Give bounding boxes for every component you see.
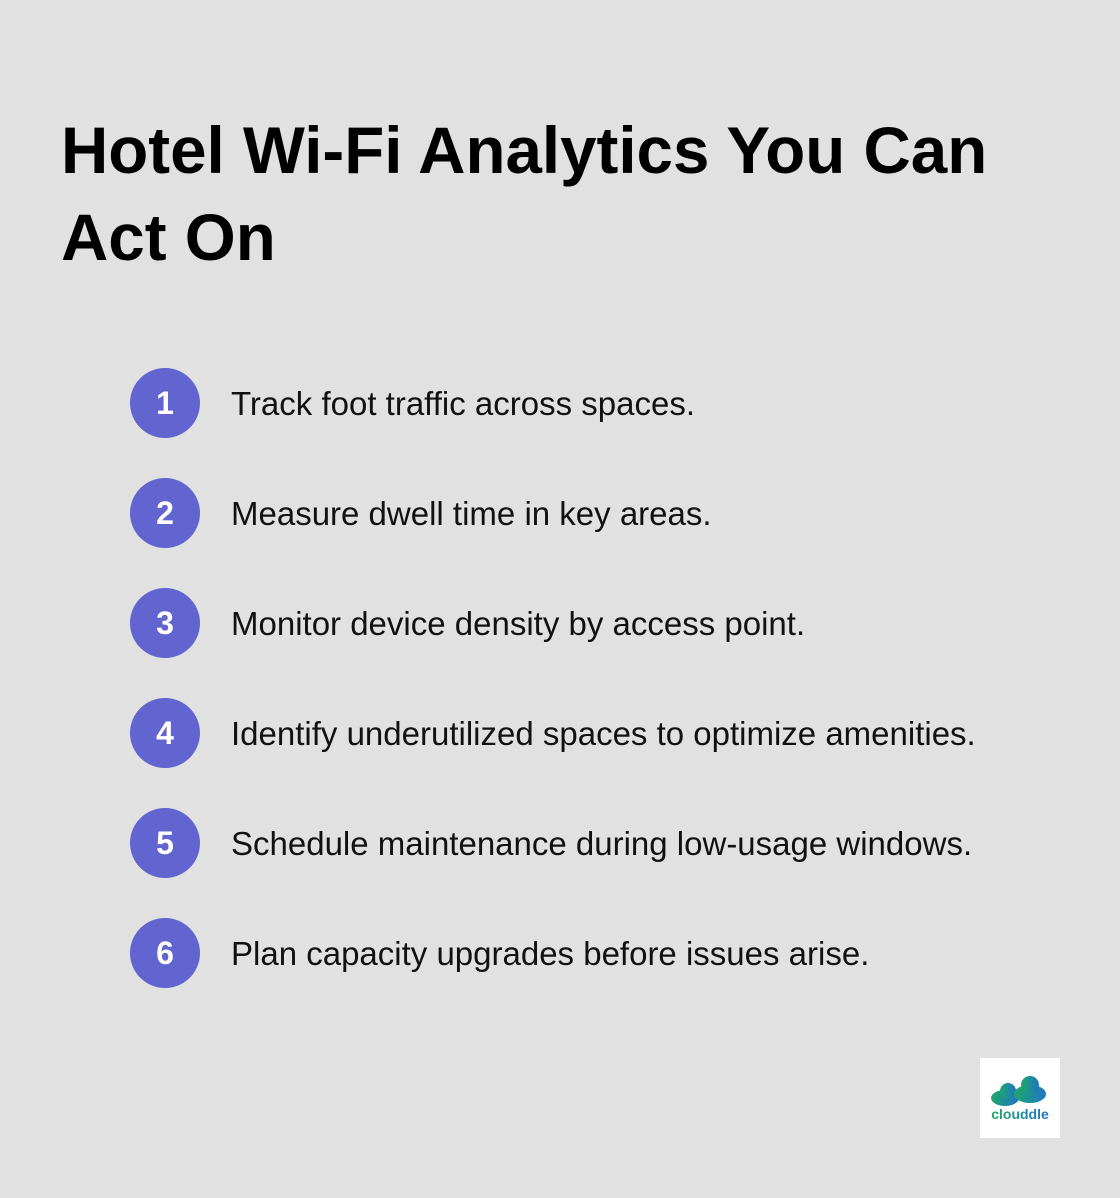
- item 1: [130, 368, 695, 438]
- item 2: [130, 478, 712, 548]
- item 3: 3: [156, 605, 174, 641]
- item 6: 6: [156, 935, 174, 971]
- item 3: [130, 588, 805, 658]
- item 4: [130, 698, 976, 768]
- logo: clouddle: [991, 1106, 1049, 1122]
- item 4: Identify underutilized spaces to optimize amenities.: [231, 715, 976, 752]
- logo: [980, 1058, 1060, 1138]
- item 1: Track foot traffic across spaces.: [231, 385, 695, 422]
- item 3: Monitor device density by access point.: [231, 605, 805, 642]
- item 1: 1: [156, 385, 174, 421]
- item 2: 2: [156, 495, 174, 531]
- item 6: Plan capacity upgrades before issues arise.: [231, 935, 869, 972]
- item 4: 4: [156, 715, 174, 751]
- item 5: 5: [156, 825, 174, 861]
- item 2: Measure dwell time in key areas.: [231, 495, 712, 532]
- item 6: [130, 918, 869, 988]
- title: Hotel Wi-Fi Analytics You Can Act On: [61, 114, 987, 274]
- item 5: Schedule maintenance during low-usage windows.: [231, 825, 972, 862]
- item 5: [130, 808, 972, 878]
